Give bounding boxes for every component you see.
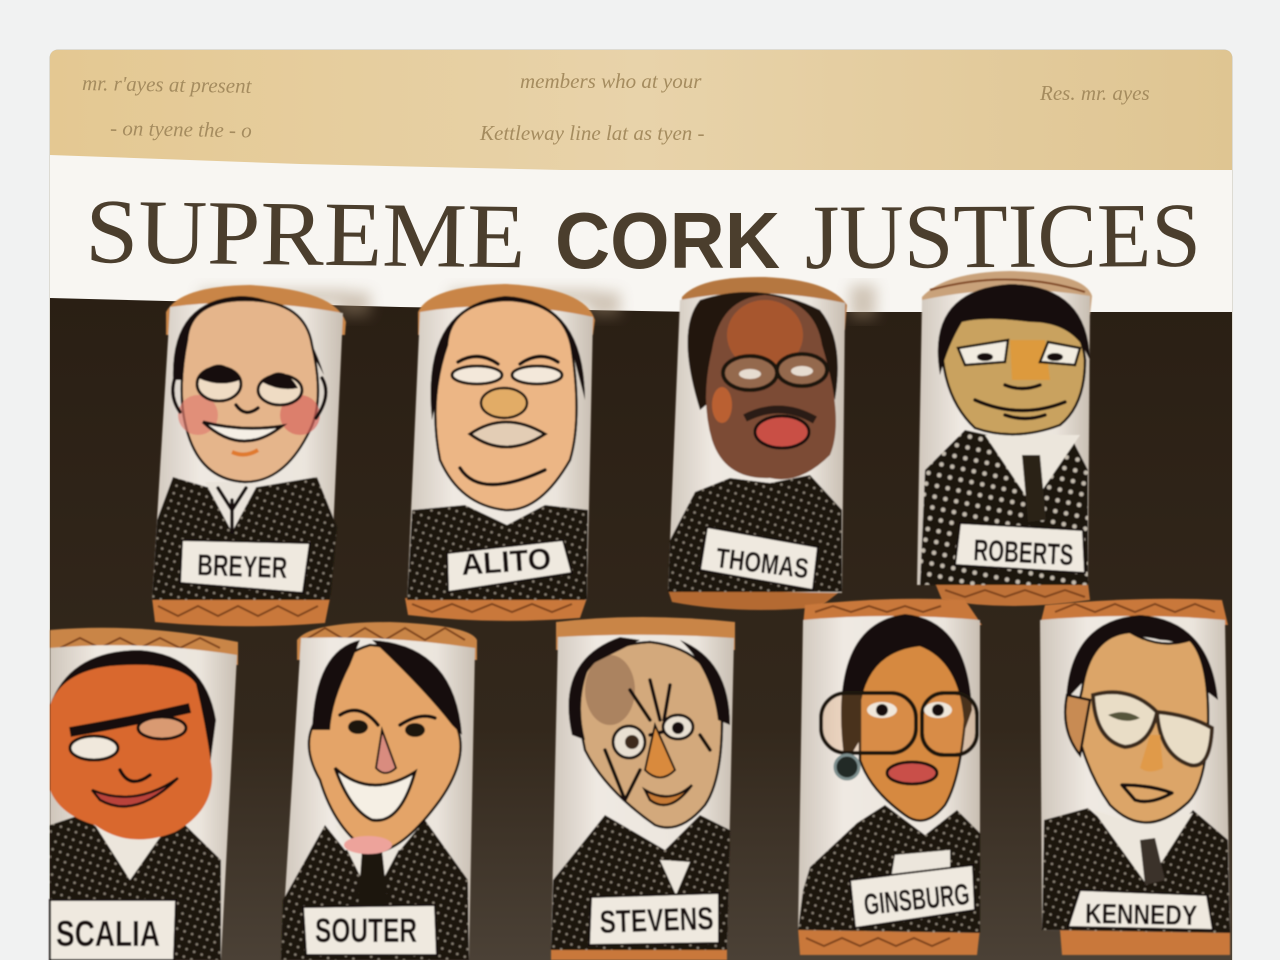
- nameplate: THOMAS: [714, 542, 810, 584]
- nameplate: ALITO: [460, 543, 552, 582]
- cork: Souter: [281, 622, 477, 960]
- features: [723, 354, 827, 448]
- title word: JUSTICES: JUSTICES: [805, 184, 1201, 288]
- nameplate: [447, 540, 572, 592]
- nameplate: ROBERTS: [973, 534, 1074, 572]
- cork: Kennedy: [1040, 599, 1230, 955]
- suit: [668, 475, 842, 592]
- features: [821, 693, 977, 784]
- suit: [281, 820, 469, 960]
- face: [575, 642, 722, 828]
- handwriting: Res. mr. ayes: [1039, 81, 1150, 105]
- features: [452, 356, 562, 485]
- features: [1093, 692, 1212, 801]
- features: [197, 364, 302, 455]
- cork: Alito: [405, 284, 595, 621]
- nameplate: STEVENS: [599, 900, 714, 940]
- title: [85, 180, 1201, 288]
- hair: [568, 637, 730, 740]
- suit: [920, 430, 1088, 585]
- cork: Roberts: [917, 271, 1092, 606]
- nameplate: [955, 523, 1085, 573]
- cork: Thomas: [668, 277, 847, 610]
- suit: [407, 505, 588, 600]
- nameplate: [1068, 890, 1213, 931]
- hair: [312, 640, 462, 735]
- nameplate: KENNEDY: [1085, 898, 1198, 931]
- face: [942, 305, 1085, 434]
- parchment manuscript: [50, 50, 1232, 180]
- face: [860, 645, 965, 821]
- face: [706, 295, 836, 479]
- cork: Stevens: [551, 617, 735, 960]
- handwriting: - on tyene the - o: [110, 116, 252, 142]
- hair: [431, 296, 585, 420]
- hair: [688, 292, 838, 410]
- icon: earring: [835, 755, 859, 779]
- nameplate: [180, 540, 310, 593]
- nameplate: [850, 865, 975, 928]
- nameplate: SCALIA: [56, 913, 160, 954]
- hair: [938, 284, 1090, 375]
- suit: [798, 805, 980, 933]
- nameplate: GINSBURG: [862, 878, 971, 922]
- handwriting: Kettleway line lat as tyen -: [479, 121, 705, 145]
- face: [50, 665, 212, 840]
- nameplate: [50, 900, 176, 960]
- face: [1075, 632, 1208, 822]
- face: [182, 300, 318, 482]
- nameplate: SOUTER: [315, 912, 417, 950]
- cork: Ginsburg: [798, 599, 982, 955]
- nameplate: BREYER: [197, 549, 288, 585]
- suit: [1042, 808, 1230, 933]
- handwriting: [82, 69, 1150, 145]
- features: [605, 680, 710, 805]
- nameplate: [700, 527, 818, 590]
- cork: Scalia: [50, 628, 238, 960]
- nameplate: [589, 893, 719, 945]
- features: [70, 708, 190, 806]
- face: [309, 645, 461, 852]
- suit: [50, 815, 221, 960]
- white title band: [50, 155, 1232, 312]
- suit: [551, 815, 730, 950]
- hair: [841, 614, 972, 765]
- dark table background: [50, 295, 1232, 960]
- title word: SUPREME: SUPREME: [85, 180, 526, 287]
- hair: [173, 296, 324, 380]
- hair: [1066, 615, 1218, 700]
- features: [335, 710, 435, 820]
- handwriting: mr. r'ayes at present: [82, 71, 253, 98]
- nameplate: [303, 905, 437, 955]
- face: [435, 300, 577, 510]
- cork shadows: [200, 285, 876, 319]
- suit: [152, 477, 337, 600]
- ear: [1065, 695, 1090, 755]
- cork: Breyer: [152, 285, 346, 626]
- handwriting: members who at your: [520, 69, 702, 93]
- title word: CORK: CORK: [555, 196, 780, 285]
- features: [958, 340, 1080, 418]
- hair: [50, 650, 216, 765]
